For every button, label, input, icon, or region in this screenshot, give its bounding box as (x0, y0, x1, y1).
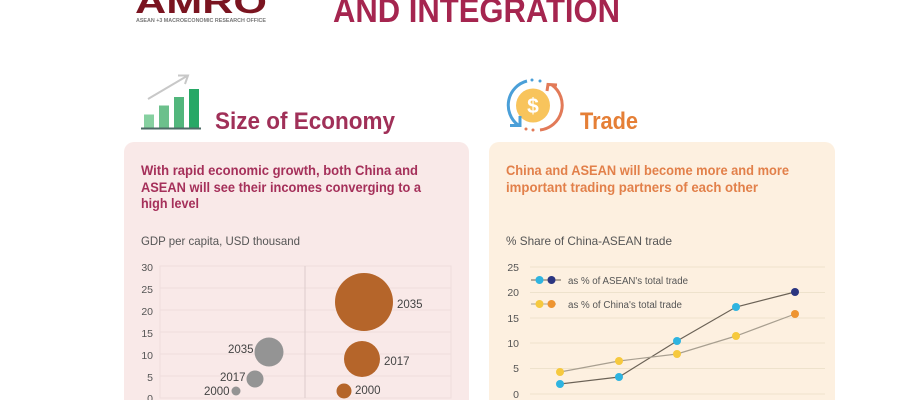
chart caption: share of trade: % Share of China-ASEAN trade (506, 234, 672, 248)
bubble chart: 15 (141, 328, 153, 340)
panel text: trade message: important trading partners of each other (506, 179, 759, 195)
line chart: 20 (507, 287, 519, 299)
logo: AMRO (135, 0, 267, 24)
line chart: 10 (507, 338, 519, 350)
icon: growth bar chart (141, 76, 201, 130)
bubble chart: 2000 (204, 386, 230, 398)
heading: Size of Economy: Size of Economy (215, 108, 395, 135)
bubble chart: 2017 (384, 356, 410, 368)
panel text: economy message: high level (141, 195, 199, 211)
bubble chart: 5 (147, 372, 153, 384)
panel: trade (489, 142, 835, 400)
line chart (507, 262, 825, 400)
bubble chart: 30 (141, 262, 153, 274)
panel text: trade message: China and ASEAN will become more and more (506, 162, 789, 178)
line chart: 25 (507, 262, 519, 274)
icon: trade dollar cycle (508, 78, 562, 132)
icon: trade dollar cycle: $ (527, 95, 539, 118)
panel text: economy message: ASEAN will see their incomes converging to a (141, 179, 421, 195)
legend: as % of China's total trade (568, 300, 682, 311)
bubble chart: 10 (141, 350, 153, 362)
chart caption: GDP per capita: GDP per capita, USD thousand (141, 234, 300, 248)
line chart: 15 (507, 313, 519, 325)
bubble chart: 20 (141, 306, 153, 318)
bubble chart: 2017 (220, 372, 246, 384)
bubble chart: 2035 (228, 344, 254, 356)
bubble chart (141, 262, 451, 400)
bubble chart: 2000 (355, 385, 381, 397)
heading: Trade: Trade (580, 108, 638, 135)
bubble chart: 25 (141, 284, 153, 296)
panel text: trade message (506, 162, 789, 195)
bubble chart: 2035 (397, 299, 423, 311)
legend (531, 276, 688, 311)
legend: as % of ASEAN's total trade (568, 276, 688, 287)
line chart: 5 (513, 363, 519, 375)
logo: AMRO: ASEAN +3 MACROECONOMIC RESEARCH OFFICE (136, 18, 266, 24)
panel: size of economy (124, 142, 469, 400)
panel text: economy message (141, 162, 421, 211)
panel text: economy message: With rapid economic growth, both China and (141, 162, 418, 178)
